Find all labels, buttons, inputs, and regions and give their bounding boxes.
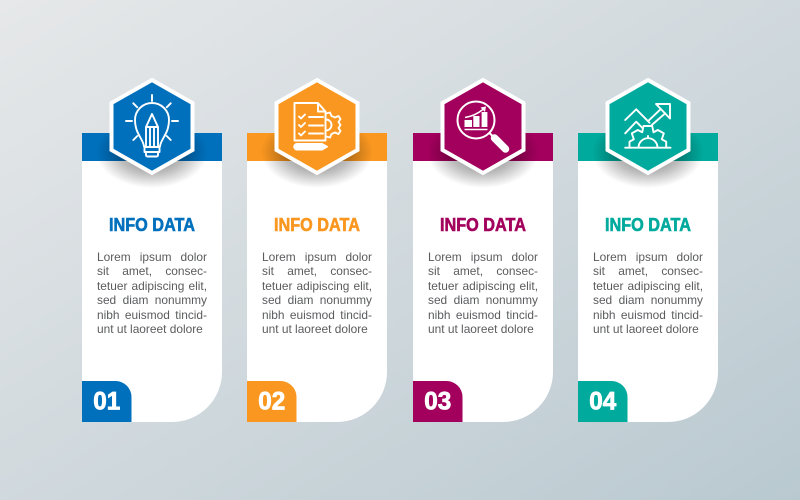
body text: Lorem ipsum dolor [97,250,207,264]
number: 03 [424,388,451,416]
number: 01 [93,388,120,416]
body text: sed diam nonummy [97,293,207,307]
body text [262,250,372,336]
body text: sed diam nonummy [262,293,372,307]
body text: sit amet, consec- [593,264,703,278]
panel: card 02 [247,78,387,422]
hexagon badge [112,80,192,173]
body text [428,250,538,336]
body text: tetuer adipiscing elit, [97,279,207,293]
body text [97,250,207,336]
heading: INFO DATA [605,214,691,235]
icon: gear with rising arrow [625,104,670,148]
body text: nibh euismod tincid- [97,308,207,322]
number: 02 [258,388,285,416]
hexagon shadow [264,133,370,186]
body text: unt ut laoreet dolore [428,322,534,336]
body text: Lorem ipsum dolor [262,250,372,264]
number badge [413,381,462,422]
body text: tetuer adipiscing elit, [593,279,703,293]
number badge [82,381,132,422]
body text: unt ut laoreet dolore [262,322,368,336]
header band [578,133,718,161]
card body [82,133,222,422]
body text: Lorem ipsum dolor [428,250,538,264]
body text [593,250,703,336]
hexagon shadow [432,134,534,186]
heading: INFO DATA [440,214,526,235]
body text: nibh euismod tincid- [593,308,703,322]
number: 04 [589,388,616,416]
hexagon shadow [100,133,204,186]
hexagon shadow [596,134,700,186]
body text: sed diam nonummy [428,293,538,307]
header band [247,133,387,161]
hexagon badge [608,80,688,173]
body text: nibh euismod tincid- [262,308,372,322]
body text: Lorem ipsum dolor [593,250,703,264]
body text: tetuer adipiscing elit, [262,279,372,293]
hexagon badge [442,80,524,173]
body text: nibh euismod tincid- [428,308,538,322]
body text: tetuer adipiscing elit, [428,279,538,293]
number badge [578,381,628,422]
heading: INFO DATA [274,214,360,235]
header band [82,133,222,161]
header band [413,133,553,161]
body text: sit amet, consec- [97,264,207,278]
card body [247,133,387,422]
body text: unt ut laoreet dolore [593,322,699,336]
icon: checklist document with gear and pencil [294,103,340,150]
heading: INFO DATA [109,214,195,235]
body text: sit amet, consec- [262,264,372,278]
body text: unt ut laoreet dolore [97,322,203,336]
panel: card 01 [82,78,222,422]
hexagon badge [276,80,358,173]
card body [578,133,718,422]
body text: sit amet, consec- [428,264,538,278]
card body [413,133,553,422]
icon: light bulb with pencil [126,95,178,156]
body text: sed diam nonummy [593,293,703,307]
number badge [247,381,296,422]
icon: magnifier over bar chart [458,102,506,149]
panel: card 04 [578,78,718,422]
panel: card 03 [413,78,553,422]
